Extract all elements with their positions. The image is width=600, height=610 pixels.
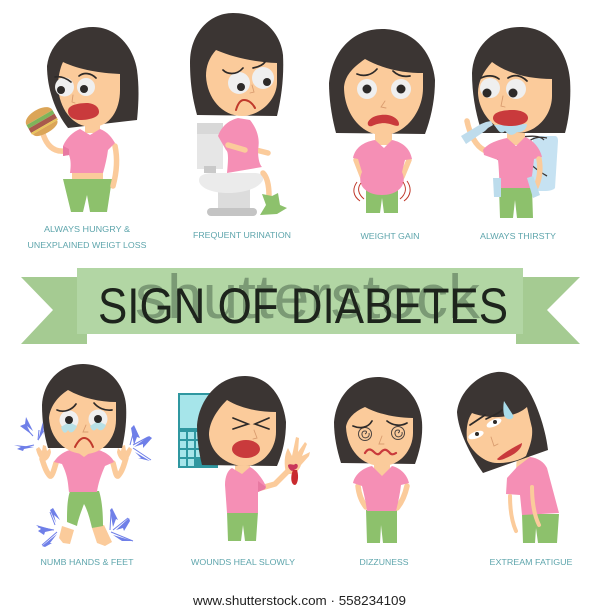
- figure: frequent urination: [190, 13, 287, 216]
- icon: burger: [22, 103, 61, 140]
- labels: top row: [28, 224, 556, 250]
- figure: numb hands and feet: [14, 364, 152, 547]
- figure: weight gain: [329, 29, 435, 213]
- body: [353, 130, 412, 213]
- icon: red wave marks: [354, 181, 410, 201]
- icon: dizzy spiral eyes: [358, 426, 404, 440]
- labels: top row: ALWAYS HUNGRY &: [44, 224, 130, 234]
- head: [197, 376, 286, 466]
- watermark: shutterstock: [135, 263, 481, 332]
- labels: top row: UNEXPLAINED WEIGT LOSS: [28, 240, 147, 250]
- banner: [21, 263, 580, 344]
- body: [36, 445, 132, 546]
- icon: sweat drop: [503, 401, 513, 419]
- head: [472, 27, 570, 135]
- labels: top row: ALWAYS THIRSTY: [480, 231, 556, 241]
- body: [218, 118, 287, 215]
- head: [47, 27, 138, 128]
- window: [178, 393, 218, 468]
- figure: extreme fatigue: [457, 372, 559, 543]
- head: [190, 13, 283, 116]
- labels: bottom row: WOUNDS HEAL SLOWLY: [191, 557, 295, 567]
- labels: bottom row: [40, 557, 573, 567]
- body: [506, 448, 559, 543]
- footer: stock image url and id: www.shutterstock.com · 558234109: [192, 593, 406, 608]
- labels: bottom row: EXTREAM FATIGUE: [490, 557, 573, 567]
- toilet: [197, 123, 263, 216]
- ribbon centre: [77, 268, 523, 334]
- figure: always thirsty: [461, 27, 570, 218]
- icon: water bottle: [461, 121, 493, 144]
- head: [457, 372, 548, 473]
- head: [329, 29, 435, 135]
- labels: top row: WEIGHT GAIN: [360, 231, 420, 241]
- labels: bottom row: DIZZUNESS: [360, 557, 409, 567]
- icon: water backpack: [497, 136, 558, 191]
- ribbon tails: [21, 277, 580, 344]
- head: [334, 377, 422, 466]
- labels: top row: FREQUENT URINATION: [193, 230, 291, 240]
- body and pants: [43, 120, 116, 212]
- figure: wounds heal slowly: [178, 376, 310, 541]
- body: [467, 121, 542, 218]
- body: [225, 437, 310, 541]
- title: SIGN OF DIABETES: [98, 278, 508, 334]
- labels: bottom row: NUMB HANDS & FEET: [40, 557, 134, 567]
- head: [42, 364, 126, 454]
- body: [353, 462, 409, 543]
- figure: always hungry: [22, 27, 138, 212]
- icon: numbness bolts: [14, 417, 152, 547]
- figure: dizziness: [334, 377, 422, 543]
